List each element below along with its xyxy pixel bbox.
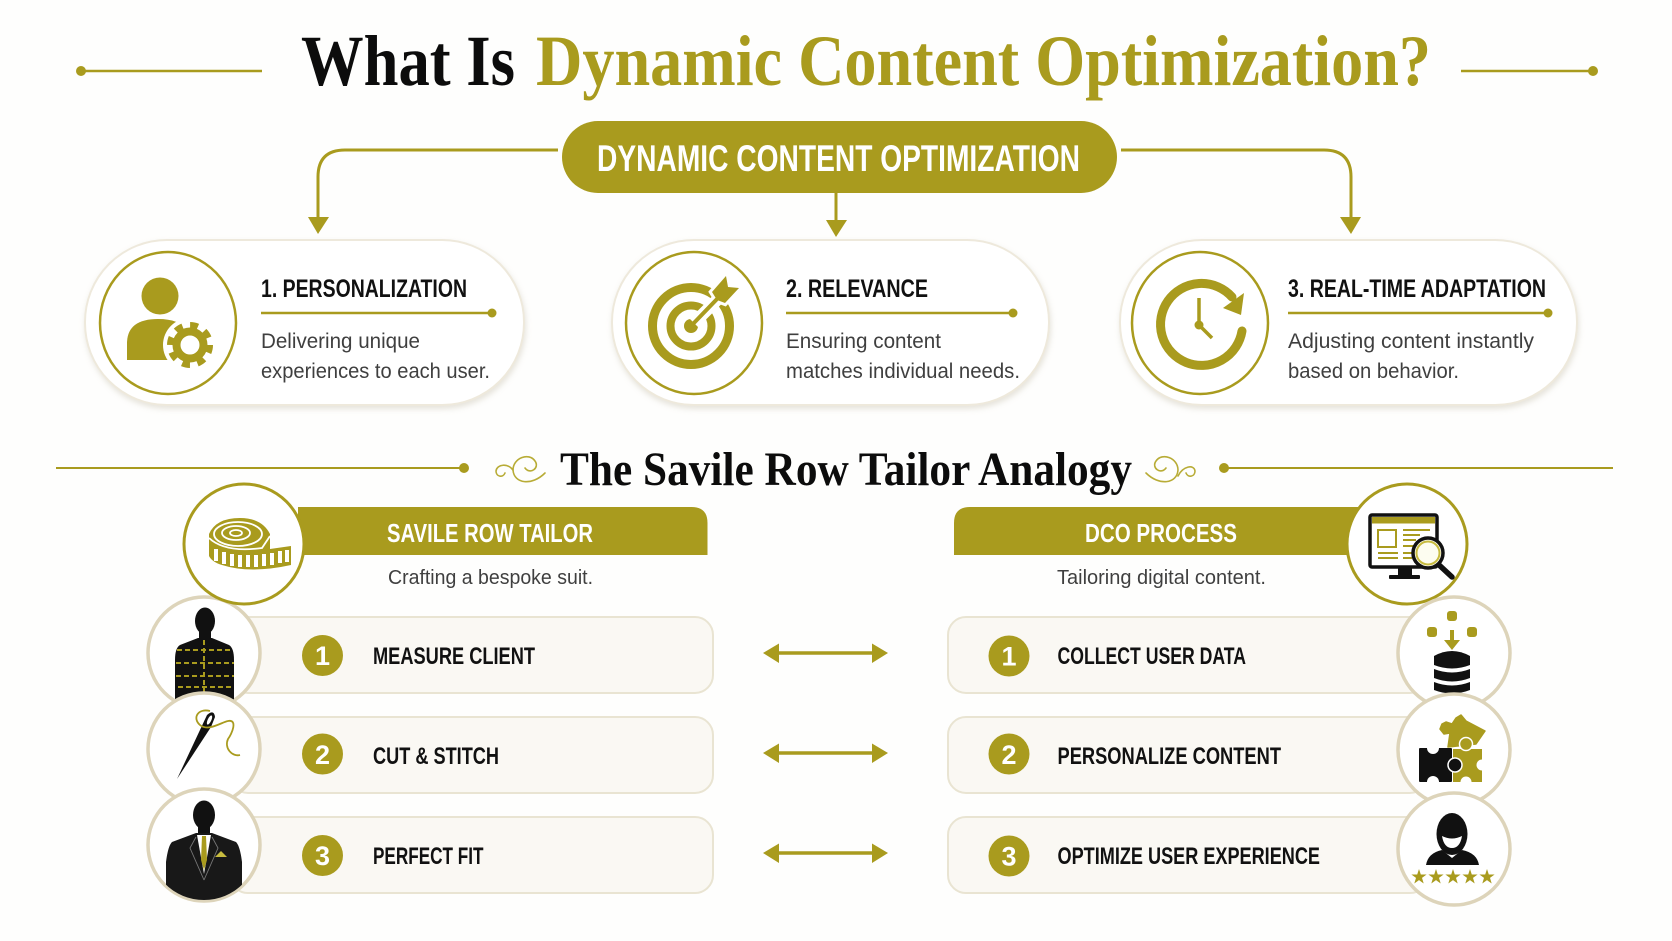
panel: personalization: 1. PERSONALIZATION [261,275,467,303]
arrow: measure to collect [763,644,888,663]
icon: user with five star rating [1398,793,1510,905]
arrow: fit to optimize [763,844,888,863]
row: optimize user experience: 3 [1001,842,1017,872]
icon: monitor with magnifier [1347,484,1467,604]
icon: clock with circular arrow [1161,283,1244,365]
central pill: DYNAMIC CONTENT OPTIMIZATION [597,138,1080,179]
panel: savile row tailor header: SAVILE ROW TAILOR [387,518,593,548]
icon: needle and thread [148,693,260,805]
icon: puzzle pieces [1398,694,1510,806]
row: cut and stitch [230,717,713,793]
row: measure client: 1 [315,641,330,671]
icon: jacket with measuring lines [148,597,260,709]
row: collect user data: COLLECT USER DATA [1058,643,1246,670]
panel: personalization: Delivering unique [261,330,420,353]
arrow: to relevance [826,193,847,237]
row: collect user data [948,617,1428,693]
row: perfect fit: PERFECT FIT [373,843,484,870]
section heading: The Savile Row Tailor Analogy [560,443,1132,496]
panel: personalization [85,240,524,405]
panel: personalization: experiences to each user. [261,360,490,383]
right ornament [1146,457,1195,482]
title: Dynamic Content Optimization? [536,21,1431,101]
row: measure client [230,617,713,693]
title: What Is [301,21,515,101]
panel: real-time adaptation [1120,240,1577,405]
row: collect user data: 1 [1001,642,1017,672]
icon: target with arrow [652,276,739,364]
panel: dco process header: DCO PROCESS [1085,518,1237,548]
panel: dco process header: Tailoring digital content. [1057,566,1266,589]
arrow: cut to personalize [763,744,888,763]
panel: real-time adaptation: Adjusting content instantly [1288,330,1535,353]
left ornament [496,457,545,482]
title left rule [76,66,262,76]
row: perfect fit: 3 [315,841,330,871]
arrow: to personalization [308,150,558,234]
panel: real-time adaptation: 3. REAL-TIME ADAPTATION [1288,275,1546,303]
section right rule [1219,463,1613,473]
row: cut and stitch: 2 [315,740,330,770]
row: personalize content [948,717,1428,793]
icon: measuring tape [184,484,304,604]
panel: real-time adaptation: based on behavior. [1288,360,1459,383]
title right rule [1461,66,1598,76]
section left rule [56,463,469,473]
panel: relevance: matches individual needs. [786,360,1020,383]
panel: savile row tailor header [298,507,708,617]
panel: relevance: Ensuring content [786,330,941,353]
icon: data into database [1398,597,1510,709]
row: measure client: MEASURE CLIENT [373,643,535,670]
row: cut and stitch: CUT & STITCH [373,743,499,770]
row: optimize user experience [948,817,1428,893]
panel: relevance [612,240,1049,405]
icon: man in suit [148,789,260,901]
panel: savile row tailor header: Crafting a bespoke suit. [388,566,593,589]
row: personalize content: PERSONALIZE CONTENT [1058,743,1281,770]
row: perfect fit [230,817,713,893]
row: personalize content: 2 [1001,740,1017,770]
panel: relevance: 2. RELEVANCE [786,275,928,303]
panel: dco process header [954,507,1370,617]
central pill [562,121,1117,193]
arrow: to real-time adaptation [1121,150,1361,234]
row: optimize user experience: OPTIMIZE USER EXPERIENCE [1058,843,1320,870]
icon: user with gear [127,278,217,372]
